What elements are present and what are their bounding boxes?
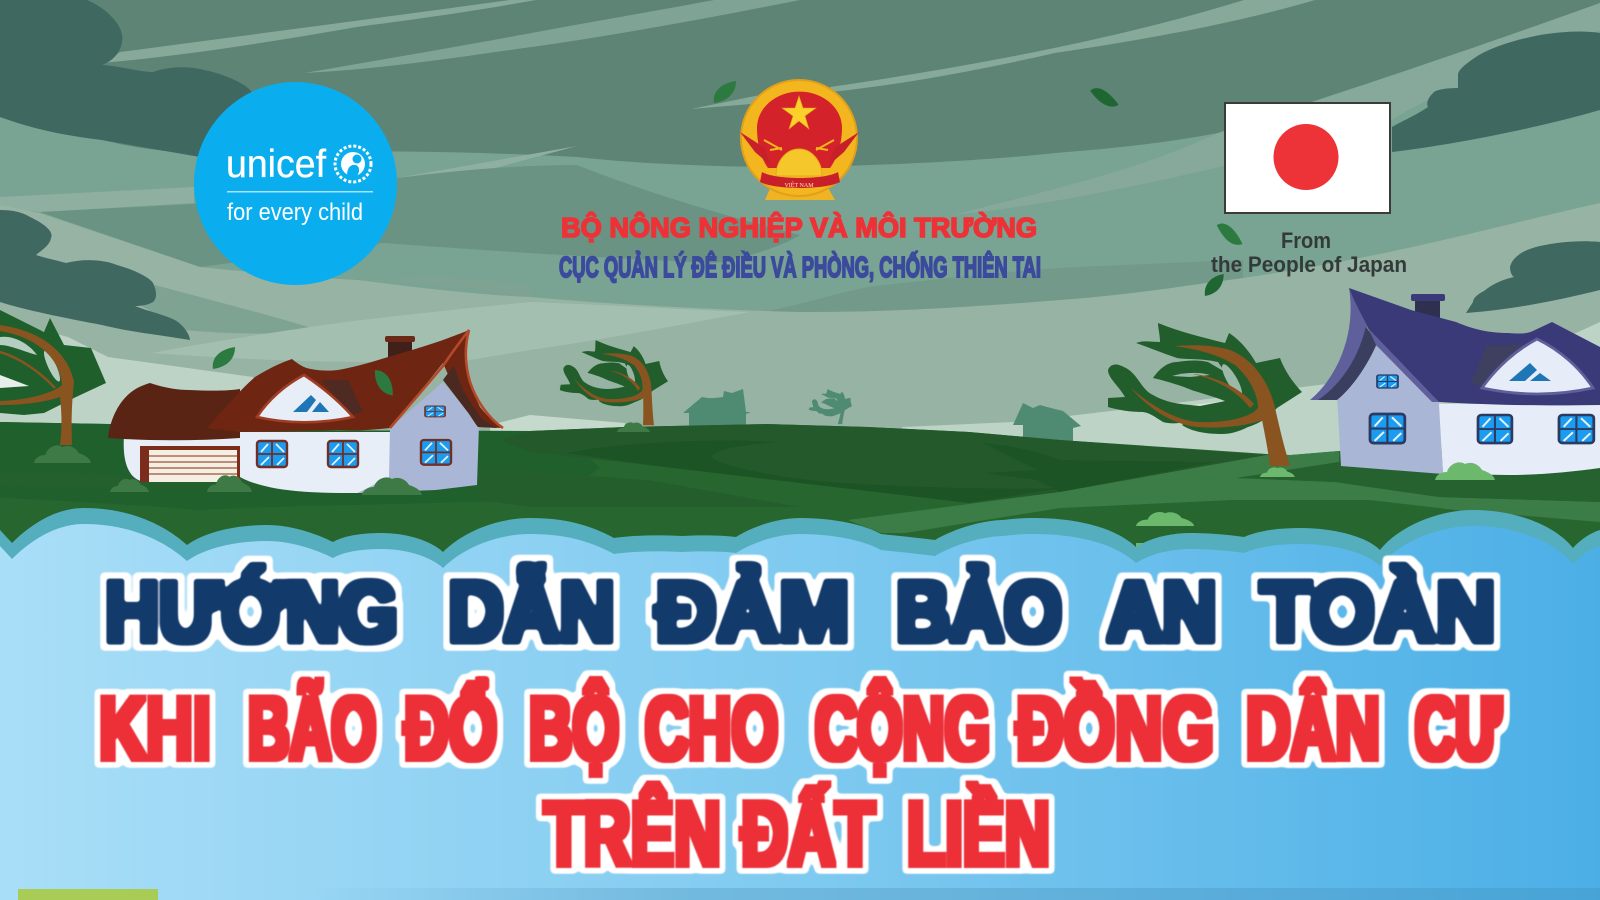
leaf: on red roof	[371, 370, 397, 396]
heading: ministry name: BỘ NÔNG NGHIỆP VÀ MÔI TRƯỜNG	[561, 211, 1037, 243]
emblem text: Việt Nam: VIỆT NAM	[784, 181, 814, 189]
leaf: left	[213, 347, 235, 369]
title: line 1: ĐẢM	[655, 564, 850, 660]
title: line 1: BẢO	[896, 564, 1062, 660]
heading: department name: CỤC QUẢN LÝ ĐÊ ĐIỀU VÀ PHÒNG, CHỐNG THIÊN TAI	[559, 250, 1041, 284]
title: line 3: LIỀN	[907, 783, 1050, 885]
logo text: for every child: for every child	[227, 199, 363, 226]
water: blue flood area	[0, 524, 1600, 900]
title: line 2: BỘ	[529, 678, 619, 778]
leaf: near Japan label upper	[1217, 219, 1242, 250]
title: line 2	[99, 678, 1501, 778]
logo: Japan flag	[1225, 103, 1390, 213]
scene: stormy sky background	[0, 0, 1600, 560]
house: right blue-roof house	[1310, 288, 1600, 480]
cloud: lower right	[1466, 241, 1600, 313]
silhouette: distant house right	[1013, 403, 1081, 445]
title: line 2: CƯ	[1415, 678, 1501, 778]
bush: at large right tree	[1260, 467, 1295, 477]
title: line 1: AN	[1107, 565, 1217, 660]
bush: at middle tree	[617, 422, 650, 432]
bush: partly hidden behind water	[1136, 543, 1168, 555]
title: line 3: ĐẤT	[741, 783, 875, 885]
title: line 1: HƯỚNG	[105, 565, 398, 660]
text: From the People of Japan: From	[1281, 228, 1331, 253]
text: From the People of Japan: the People of Japan	[1211, 252, 1407, 277]
title: line 2: ĐỒNG	[1016, 678, 1214, 778]
panel edge: green tab at bottom left	[18, 889, 158, 900]
emblem: Vietnam national emblem	[740, 80, 859, 200]
title: line 2: DÂN	[1246, 678, 1380, 778]
tree: middle bent tree	[554, 340, 675, 425]
title: line 2: CỘNG	[815, 678, 990, 778]
leaf: top centre	[714, 81, 736, 103]
leaf: top right	[1090, 82, 1119, 114]
bush: small light green	[1136, 512, 1194, 526]
title: line 2: KHI	[99, 678, 211, 778]
water: bottom shadow	[300, 888, 1600, 900]
title: line 1	[105, 564, 1496, 660]
title: line 1: TOÀN	[1260, 565, 1496, 660]
title: line 2: CHO	[645, 678, 778, 778]
text: From the People of Japan	[1211, 228, 1407, 277]
ground: green hills	[0, 422, 1600, 620]
icon: UNICEF emblem	[335, 146, 371, 182]
leaf: near Japan label lower	[1205, 274, 1224, 296]
cloud: top left	[0, 0, 262, 157]
silhouette: distant house left	[683, 389, 751, 426]
logo: UNICEF	[194, 82, 397, 285]
title: line 3: TRÊN	[544, 783, 721, 885]
tree: left bent tree	[0, 310, 106, 463]
title: line 2: ĐỔ	[404, 678, 497, 778]
house: left red-roof house	[108, 330, 503, 495]
title: line 1: DẪN	[448, 564, 615, 660]
tree: large right bent tree	[1108, 323, 1302, 466]
logo text: unicef: unicef	[226, 143, 326, 186]
water: outer teal scalloped edge	[0, 508, 1600, 900]
cloud: lower left	[0, 210, 190, 340]
title: line 3	[544, 783, 1050, 885]
title: line 2: BÃO	[248, 678, 376, 778]
silhouette: distant bent tree	[803, 389, 859, 424]
cloud: top right	[1392, 32, 1600, 152]
